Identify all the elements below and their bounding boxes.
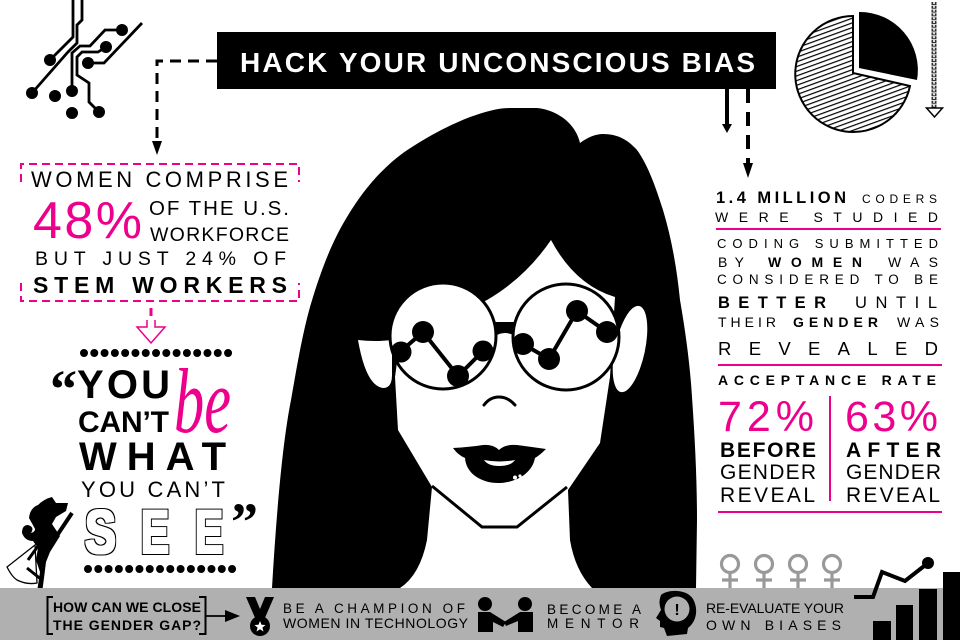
illustration: woman with glasses (272, 108, 697, 588)
icon: handshake (478, 597, 533, 632)
statistic text: OF THE U.S. (149, 197, 289, 220)
action: champion: BE A CHAMPION OF (283, 601, 465, 616)
left ear (358, 340, 392, 388)
dashed pink frame (21, 164, 299, 301)
arrow: chain down (926, 2, 942, 117)
findings text: WAS (888, 254, 938, 270)
panel: coder study (715, 189, 942, 513)
action: re-evaluate (706, 600, 844, 633)
after reveal statistic: GENDER (846, 461, 941, 484)
findings text: THEIR (718, 314, 776, 330)
jaw line (432, 486, 567, 527)
arrow: title to left panel (152, 61, 217, 155)
panel: women in STEM statistic (21, 164, 299, 301)
quote text: YOU CAN’T (81, 477, 225, 502)
quote text: S (85, 498, 116, 566)
statistic text: WOMEN COMPRISE (31, 167, 288, 192)
quote text: E (195, 498, 223, 566)
findings text: BETTER (718, 294, 826, 312)
callout: how can we close the gender gap: THE GENDER GAP? (53, 617, 201, 633)
icon: medal (246, 597, 274, 636)
icons: female symbols (722, 556, 840, 590)
findings text: REVEALED (718, 338, 938, 359)
before reveal statistic: 72% (718, 393, 814, 441)
arrow: to actions (206, 610, 240, 622)
after reveal statistic (845, 393, 941, 507)
action: champion (283, 601, 469, 631)
icon: head with exclamation: ! (674, 602, 680, 619)
action: mentor (547, 602, 641, 631)
action: mentor: BECOME A (547, 602, 641, 617)
study text: WERE STUDIED (715, 209, 938, 225)
icon: circuit board (26, 0, 142, 119)
before reveal statistic: REVEAL (720, 484, 815, 507)
quote text (50, 350, 258, 566)
quote text: WHAT (79, 435, 226, 479)
icon: head with exclamation (656, 591, 696, 636)
action: re-evaluate: RE-EVALUATE YOUR (706, 600, 844, 616)
after reveal statistic: 63% (845, 393, 938, 441)
title banner: HACK YOUR UNCONSCIOUS BIAS (240, 47, 755, 78)
title banner (217, 32, 776, 89)
quote text: CAN’T (78, 406, 169, 439)
panel: quote (50, 350, 258, 569)
chart: rising bars and line (854, 557, 960, 640)
findings text (717, 236, 939, 359)
quote text: “ (50, 359, 77, 419)
after reveal statistic: AFTER (846, 439, 941, 462)
study text: CODERS (862, 192, 937, 206)
findings text: UNTIL (855, 294, 937, 312)
icon: superhero silhouette (7, 497, 72, 593)
statistic text: WORKFORCE (150, 224, 289, 246)
findings text: WAS (897, 314, 939, 330)
findings text: CODING SUBMITTED (717, 236, 938, 251)
action: champion: WOMEN IN TECHNOLOGY (283, 615, 469, 631)
findings text: GENDER (793, 314, 878, 330)
arrow: dashed down from title (743, 89, 753, 178)
quote text: be (174, 350, 231, 452)
quote text: ” (231, 492, 258, 552)
study text: 1.4 MILLION (716, 189, 846, 207)
arrow: solid down from title (722, 89, 732, 133)
findings text: BY (718, 254, 745, 270)
after reveal statistic: REVEAL (846, 484, 940, 507)
callout: how can we close the gender gap (48, 597, 206, 634)
study text (715, 189, 938, 225)
face and neck (395, 240, 615, 588)
lips (453, 445, 546, 483)
before reveal statistic: BEFORE (720, 439, 816, 462)
hair (272, 108, 697, 588)
quote text: YOU (77, 363, 170, 407)
findings text: CONSIDERED TO BE (717, 272, 938, 287)
quote text: E (141, 498, 169, 566)
statistic text (31, 167, 289, 298)
before reveal statistic: GENDER (720, 461, 816, 484)
nose (484, 397, 515, 405)
dotted rule bottom (88, 565, 233, 573)
arrow: pink outline down (137, 308, 165, 343)
bottom band (0, 588, 960, 640)
pie chart (795, 12, 918, 132)
acceptance rate heading: ACCEPTANCE RATE (718, 372, 936, 388)
statistic text: BUT JUST 24% OF (35, 248, 286, 270)
statistic text: 48% (33, 192, 142, 250)
glasses with line chart lenses (390, 283, 619, 390)
right ear (606, 303, 654, 395)
statistic text: STEM WORKERS (33, 272, 287, 298)
before reveal statistic (718, 393, 816, 507)
dotted rule top (84, 349, 229, 357)
findings text: WOMEN (768, 254, 862, 270)
callout: how can we close the gender gap: HOW CAN WE CLOSE (53, 599, 201, 615)
action: mentor: MENTOR (547, 616, 639, 631)
action: re-evaluate: OWN BIASES (706, 617, 841, 633)
